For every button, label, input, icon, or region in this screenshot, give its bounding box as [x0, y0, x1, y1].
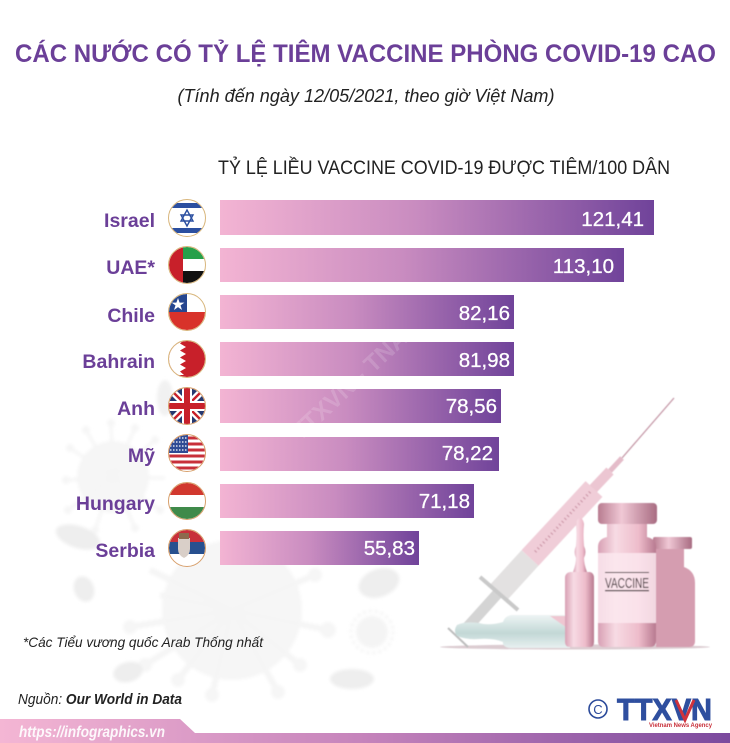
illustration: syringe and vaccine vials	[440, 398, 710, 650]
back vial	[653, 537, 695, 647]
row: Anh: Anh	[117, 398, 155, 420]
logo: TTXVN: Vietnam News Agency	[649, 723, 713, 729]
row: Serbia	[95, 531, 419, 565]
icon: flag UAE	[168, 246, 207, 284]
row: Anh: 78,56	[446, 395, 497, 418]
row: UAE: 113,10	[553, 255, 614, 278]
watermark: TTXVN - TNA	[286, 325, 413, 446]
ampoule vertical	[565, 518, 594, 647]
background virus decorations	[53, 380, 404, 702]
front vial	[598, 503, 657, 647]
row: Israel: Israel	[104, 210, 155, 232]
icon: flag Chile	[168, 294, 206, 330]
row: Israel	[104, 200, 654, 235]
source: Nguồn: Our World in Data	[18, 692, 182, 708]
bar chart	[76, 200, 654, 565]
logo: TTXVN: TTXVN	[617, 692, 712, 727]
row: Hungary: 71,18	[419, 490, 470, 513]
row: UAE: UAE*	[106, 257, 155, 279]
row: Hungary	[76, 484, 474, 518]
row: Bahrain	[82, 342, 514, 376]
row: Serbia: Serbia	[95, 540, 155, 562]
icon: flag UK	[168, 387, 206, 425]
title: CÁC NƯỚC CÓ TỶ LỆ TIÊM VACCINE PHÒNG COVID-19 CAO	[15, 38, 716, 68]
row: Chile	[107, 295, 514, 329]
copyright symbol: C	[593, 702, 603, 717]
logo: TTXVN	[589, 692, 713, 729]
syringe	[448, 398, 674, 647]
row: Anh	[117, 389, 501, 423]
website url: https://infographics.vn	[19, 724, 165, 741]
row: Bahrain: Bahrain	[82, 351, 155, 373]
footnote: *Các Tiểu vương quốc Arab Thống nhất	[23, 634, 264, 650]
row: Hungary: Hungary	[76, 493, 155, 515]
row: Bahrain: 81,98	[459, 349, 510, 372]
row: My	[128, 437, 499, 471]
row: My: 78,22	[442, 442, 493, 465]
label text: VACCINE	[605, 575, 649, 592]
chart heading: TỶ LỆ LIỀU VACCINE COVID-19 ĐƯỢC TIÊM/100 DÂN	[218, 156, 670, 179]
row: My: Mỹ	[128, 445, 155, 467]
row: Serbia: 55,83	[364, 537, 415, 560]
icon: flag USA	[168, 434, 206, 472]
subtitle: (Tính đến ngày 12/05/2021, theo giờ Việt Nam)	[178, 86, 554, 106]
footer band	[0, 719, 730, 743]
row: Chile: Chile	[107, 305, 155, 327]
row: Israel: 121,41	[581, 208, 644, 231]
icon: flag Bahrain	[168, 340, 206, 378]
row: Chile: 82,16	[459, 302, 510, 325]
row: UAE	[106, 248, 624, 282]
icon: flag Serbia	[168, 529, 206, 567]
icon: flag Hungary	[168, 482, 206, 520]
ampoule horizontal	[455, 615, 570, 648]
icon: flag Israel	[168, 199, 206, 237]
